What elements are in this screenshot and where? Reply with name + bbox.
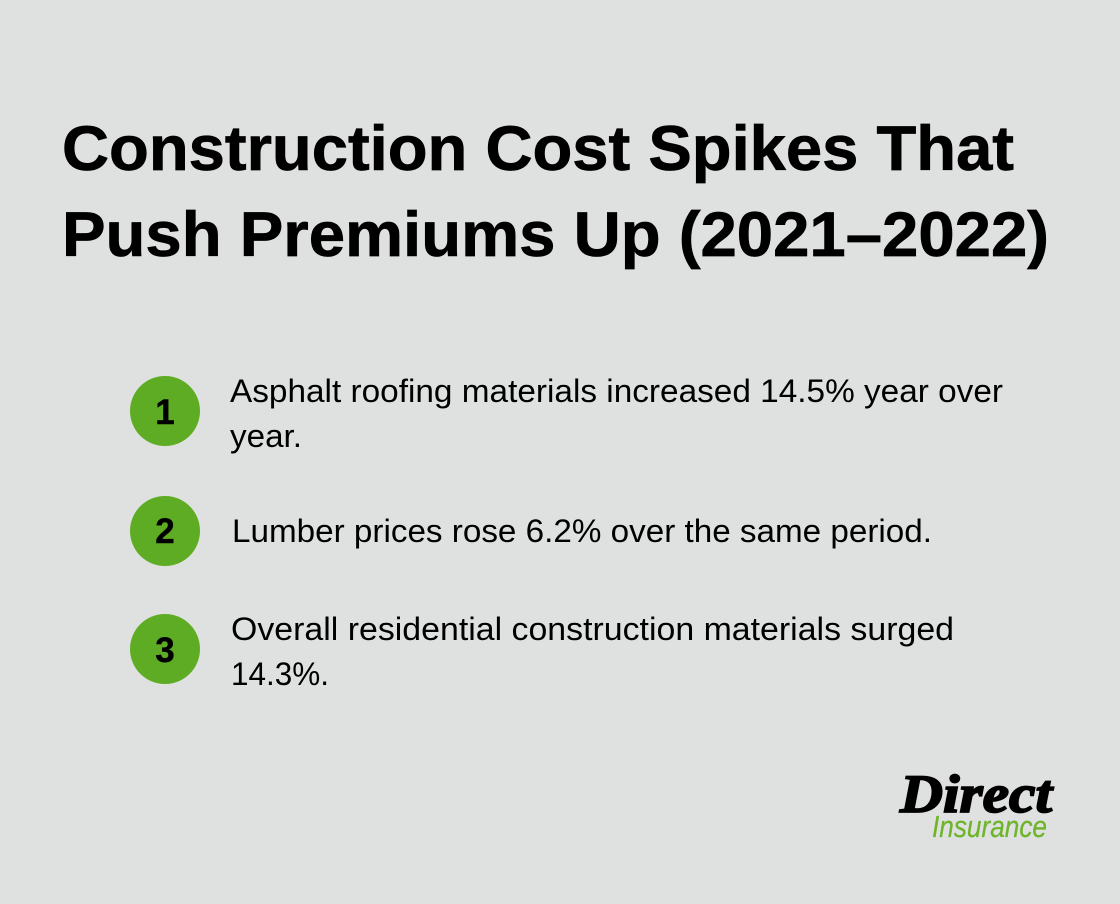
title [62,114,1049,270]
text 3: Overall residential construction materials surged [231,611,954,647]
badge 2: 2 [155,512,175,551]
text 1: Asphalt roofing materials increased 14.5% year over [230,373,1003,409]
title: Push Premiums Up (2021–2022) [62,200,1049,270]
text 3: 14.3%. [231,656,329,692]
logo: Direct Insurance: Direct [899,764,1054,824]
text 2: Lumber prices rose 6.2% over the same period. [232,513,932,549]
list item 1 [130,373,1003,454]
text 3 [231,611,954,692]
badge 2 [130,496,200,566]
text 1: year. [230,418,302,454]
logo: Direct Insurance [899,764,1054,844]
badge 1 [130,376,200,446]
list item 2 [130,496,932,566]
text 1 [230,373,1003,454]
badge 1: 1 [155,393,175,432]
badge 3 [130,614,200,684]
list item 3 [130,611,954,692]
badge 3: 3 [155,631,175,670]
title: Construction Cost Spikes That [62,114,1014,184]
logo: Direct Insurance: Insurance [932,809,1047,844]
